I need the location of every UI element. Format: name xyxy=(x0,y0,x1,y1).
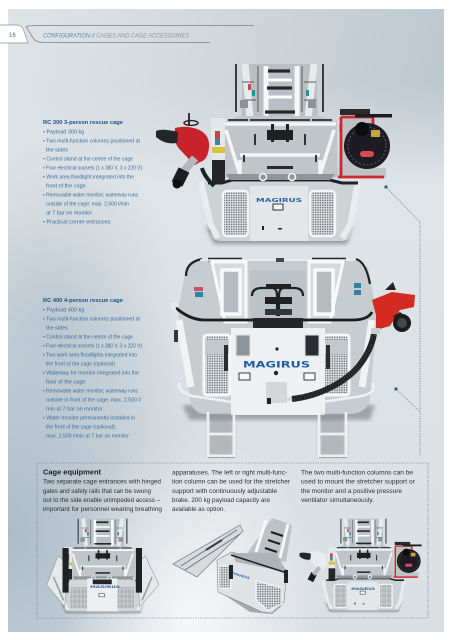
text block: cage equipment column 2: tion column can be used for the stretcher xyxy=(172,478,291,486)
text block: RC 300 rescue cage: outside of the cage; max. 2,500 l/min xyxy=(46,202,129,208)
text block: cage equipment column 1: Cage equipment xyxy=(43,468,102,476)
text block: RC 400 rescue cage: • Two work area floodlights integrated into xyxy=(43,352,137,358)
text block: RC 400 rescue cage xyxy=(43,298,142,440)
photo: cage with stretcher support xyxy=(173,518,292,614)
water monitor xyxy=(371,282,415,334)
text block: cage equipment column 1: Two separate cage entrances with hinged xyxy=(43,478,161,486)
header rule xyxy=(26,26,254,42)
photo: RC 300 cage xyxy=(156,64,392,244)
text block: cage equipment column 3: the monitor and a positive pressure xyxy=(301,488,402,495)
text block: cage equipment column 2: available as option. xyxy=(172,506,225,513)
open side gates xyxy=(47,548,159,612)
photo: cage with monitor and ventilator xyxy=(300,519,422,612)
photo: cage with monitor and ventilator: MAGIRUS xyxy=(351,587,375,591)
text block: RC 300 rescue cage: RC 300 3-person rescue cage xyxy=(43,120,123,126)
text block: RC 400 rescue cage: max. 2,500 l/min at 7 bar on monitor xyxy=(46,434,129,440)
text block: RC 400 rescue cage: • Removable water monitor; waterway runs xyxy=(43,388,138,394)
callout leader: RC 400 xyxy=(394,387,420,412)
text block: RC 400 rescue cage: • Payload 400 kg xyxy=(43,308,84,314)
photo: RC 300 cage: MAGIRUS xyxy=(256,198,303,204)
text block: RC 300 rescue cage: front of the cage xyxy=(46,184,86,190)
text block: cage equipment column 3 xyxy=(301,470,416,504)
photo: cage with open gates xyxy=(47,519,159,613)
photo: RC 400 cage: MAGIRUS xyxy=(243,360,310,370)
section title: CONFIGURATION // CAGES AND CAGE ACCESSORIES xyxy=(43,34,189,40)
text block: RC 300 rescue cage: • Payload 300 kg xyxy=(43,130,84,136)
photo: cage with stretcher support: MAGIRUS xyxy=(232,571,250,580)
text block: RC 400 rescue cage: outside in front of the cage; max. 2,500 l/ xyxy=(46,398,141,404)
text block: RC 400 rescue cage: floor of the cage xyxy=(46,380,85,386)
text block: cage equipment column 2 xyxy=(172,470,291,513)
text block: cage equipment column 1: important for personnel wearing breathing xyxy=(43,506,162,513)
text block: RC 400 rescue cage: RC 400 4-person rescue cage xyxy=(43,298,123,304)
text block: RC 300 rescue cage xyxy=(43,120,142,226)
text block: RC 300 rescue cage: • Control stand at the centre of the cage xyxy=(43,156,133,162)
text block: cage equipment column 3: used to mount the stretcher support or xyxy=(301,478,416,486)
text block: RC 300 rescue cage: • Removable water monitor; waterway runs xyxy=(43,192,138,198)
text block: RC 400 rescue cage: • Four electrical sockets (1 x 380 V, 3 x 220 V) xyxy=(43,344,142,350)
dotted equipment box xyxy=(37,463,428,618)
text block: RC 400 rescue cage: the front of the cage (optional) xyxy=(46,362,115,368)
page number tab xyxy=(0,25,28,43)
logo: open gates cage: MAGIRUS xyxy=(90,585,121,589)
text block: RC 400 rescue cage: • Waterway for monitor integrated into the xyxy=(43,370,139,376)
text block: cage equipment column 2: support with continuously adjustable xyxy=(172,488,277,495)
text block: RC 400 rescue cage: min at 7 bar on monitor xyxy=(46,406,103,412)
text block: cage equipment column 3: ventilator simultaneously. xyxy=(301,497,374,504)
text block: RC 400 rescue cage: the front of the cage (optional); xyxy=(46,424,116,430)
text block: cage equipment column 3: The two multi-function columns can be xyxy=(301,470,413,476)
hose xyxy=(272,334,374,399)
text block: cage equipment column 1: gates and safety rails that can be swung xyxy=(43,488,151,495)
text block: RC 300 rescue cage: • Four electrical sockets (1 x 380 V, 3 x 220 V) xyxy=(43,166,142,172)
text block: RC 300 rescue cage: • Practical corner entrances xyxy=(43,220,111,226)
text block: RC 400 rescue cage: • Control stand at the centre of the cage xyxy=(43,334,133,340)
text block: RC 300 rescue cage: • Two multi-function columns positioned at xyxy=(43,138,140,144)
callout leader: RC 300 xyxy=(384,185,420,456)
photo: RC 400 cage xyxy=(172,258,377,458)
text block: cage equipment column 2: brake. 200 kg payload capacity are xyxy=(172,497,270,504)
text block: RC 400 rescue cage: • Two multi-function columns positioned at xyxy=(43,316,140,322)
text block: cage equipment column 2: apparatuses. The left or right multi-func- xyxy=(172,470,287,476)
grey monitor xyxy=(300,551,327,581)
text block: RC 300 rescue cage: • Work area floodlight integrated into the xyxy=(43,174,134,180)
text block: RC 300 rescue cage: at 7 bar on monitor xyxy=(46,210,92,216)
text block: RC 400 rescue cage: • Water monitor permanently installed in xyxy=(43,416,135,422)
text block: cage equipment column 1 xyxy=(43,468,162,513)
text block: RC 400 rescue cage: the sides xyxy=(46,326,68,332)
page number tab: 16 xyxy=(9,33,16,39)
text block: RC 300 rescue cage: the sides xyxy=(46,148,68,154)
text block: cage equipment column 1: out to the side enable unimpeded access – xyxy=(43,497,160,504)
